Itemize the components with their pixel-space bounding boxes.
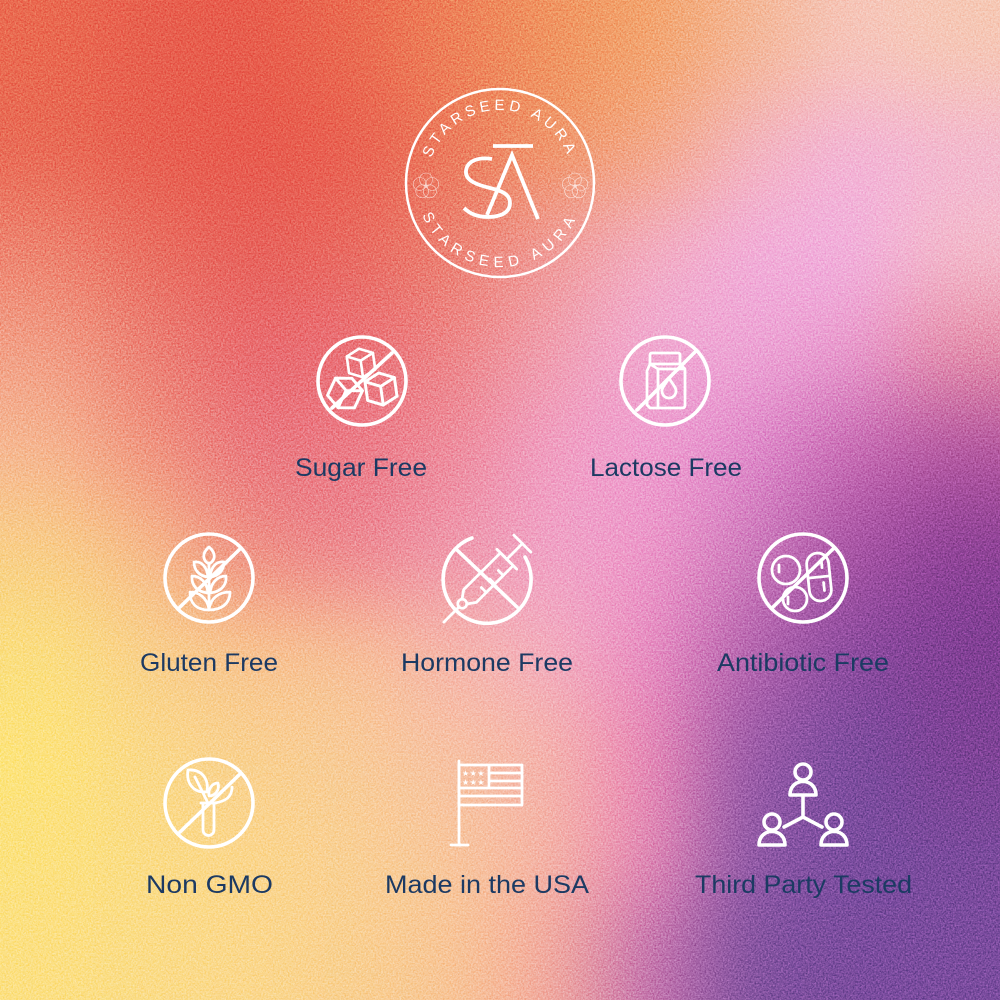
label: Gluten Free — [140, 649, 278, 677]
icon: crossed-out plant in test tube — [165, 759, 253, 847]
label: Non GMO — [146, 871, 273, 899]
icon: crossed-out sugar cubes — [318, 337, 406, 425]
feature: Hormone Free — [401, 534, 573, 677]
icon: American flag: ★★★ — [462, 778, 485, 787]
logo: Starseed Aura badge — [404, 88, 596, 278]
logo decoration: left flower — [413, 173, 439, 198]
feature: Third Party Tested — [695, 764, 912, 899]
label: Made in the USA — [385, 871, 589, 899]
logo decoration: right flower — [562, 173, 588, 198]
icon: American flag — [451, 761, 522, 845]
logo text: top arc: STARSEED AURA — [423, 100, 575, 156]
label: Sugar Free — [295, 454, 427, 482]
label: Lactose Free — [590, 454, 742, 482]
feature: Antibiotic Free — [717, 534, 889, 677]
icon: three connected people — [759, 764, 847, 845]
logo monogram: S and A with macron — [464, 146, 538, 219]
feature: Non GMO — [146, 759, 273, 899]
feature: Made in the USA — [385, 761, 589, 899]
icon: American flag: ★★★ — [462, 769, 485, 778]
icon: crossed-out pills — [759, 534, 847, 622]
icon: crossed-out wheat — [165, 534, 253, 622]
feature: Sugar Free — [295, 337, 427, 482]
label: Antibiotic Free — [717, 649, 889, 677]
icon: crossed-out syringe — [434, 534, 532, 632]
feature: Lactose Free — [590, 337, 742, 482]
label: Hormone Free — [401, 649, 573, 677]
label: Third Party Tested — [695, 871, 912, 899]
feature: Gluten Free — [140, 534, 278, 677]
logo text: bottom arc: STARSEED AURA — [423, 212, 576, 268]
icon: crossed-out milk carton — [621, 337, 709, 425]
